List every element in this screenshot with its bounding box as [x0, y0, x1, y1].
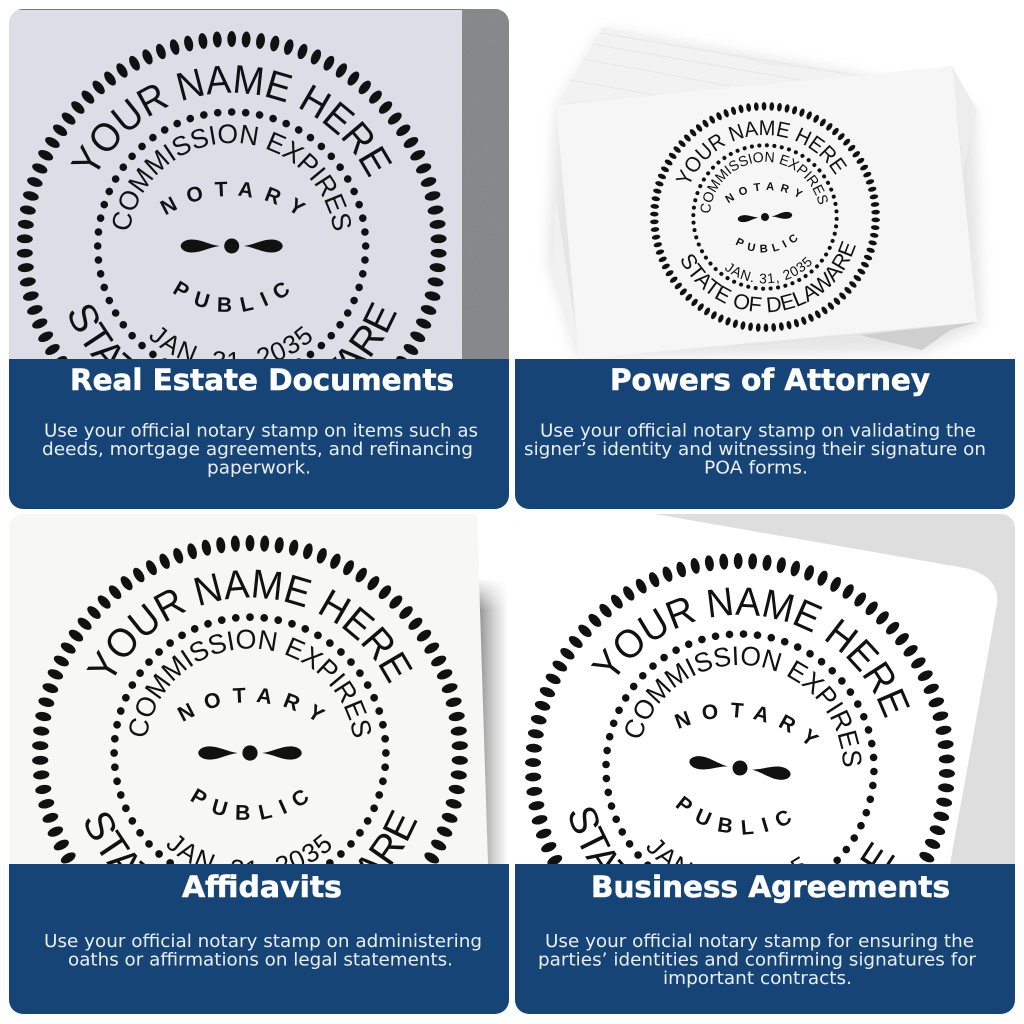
stamp impression [525, 553, 955, 864]
heading: Real Estate Documents [70, 363, 454, 397]
stamp impression: PUBLIC [676, 796, 791, 835]
stamp impression: COMMISSION EXPIRES [112, 124, 352, 230]
stamp impression: COMMISSION EXPIRES [129, 630, 371, 738]
description: signer’s identity and witnessing their signature on [524, 440, 986, 460]
heading: Business Agreements [591, 870, 950, 904]
description: Use your official notary stamp on administering [44, 932, 482, 952]
stamp impression [16, 31, 447, 359]
stamp impression: COMMISSION EXPIRES [625, 646, 862, 766]
stamp impression: YOUR NAME HERE [70, 65, 392, 178]
description [524, 422, 986, 478]
rear stack right and bottom [952, 66, 977, 170]
description: oaths or affirmations on legal statements. [68, 950, 453, 970]
stamp impression: YOUR NAME HERE [590, 588, 910, 718]
stamp impression: NOTARY [674, 702, 820, 744]
description [42, 422, 478, 478]
stamp impression: YOUR NAME HERE [676, 120, 848, 182]
stamp impression [650, 102, 880, 332]
description: Use your official notary stamp on items such as [44, 422, 478, 442]
photo: stamp on tilted white card [515, 514, 1015, 864]
stamp impression: YOUR NAME HERE [86, 570, 413, 684]
front card [556, 66, 977, 359]
caption band [9, 359, 509, 509]
photo: stamp on lavender paper [9, 9, 509, 359]
stamp impression: COMMISSION EXPIRES [700, 152, 828, 213]
panel: business agreements [515, 514, 1015, 1014]
stamp impression: NOTARY [160, 182, 306, 215]
stamp impression: PUBLIC [190, 788, 308, 820]
caption band [515, 864, 1015, 1014]
description: important contracts. [663, 969, 852, 989]
description: Use your official notary stamp for ensuring the [545, 932, 974, 952]
heading: Affidavits [182, 870, 342, 904]
stamp impression [32, 535, 468, 864]
stamp impression: PUBLIC [172, 280, 289, 312]
heading: Powers of Attorney [610, 363, 930, 397]
rear stack top [557, 27, 880, 104]
panel: powers of attorney [515, 9, 1015, 509]
description: Use your official notary stamp on validating the [540, 422, 976, 442]
photo: stamped card stack [546, 27, 985, 359]
description: deeds, mortgage agreements, and refinancing [42, 440, 473, 460]
panel: affidavits [9, 514, 509, 1014]
stamp impression: JAN. 31, 2035 [725, 256, 812, 284]
caption band [515, 359, 1015, 509]
description: POA forms. [704, 458, 808, 478]
stamp impression: NOTARY [724, 182, 803, 204]
description [538, 932, 977, 989]
caption band [9, 864, 509, 1014]
stamp impression: STATE OF DELAWARE [681, 240, 856, 312]
description [44, 932, 482, 970]
stamp impression: NOTARY [177, 688, 326, 722]
panel: real estate documents [9, 9, 509, 509]
photo: stamp on white paper with shadow [9, 514, 506, 864]
stamp impression: PUBLIC [736, 234, 798, 253]
description: parties’ identities and confirming signatures for [538, 950, 977, 970]
description: paperwork. [207, 458, 311, 478]
